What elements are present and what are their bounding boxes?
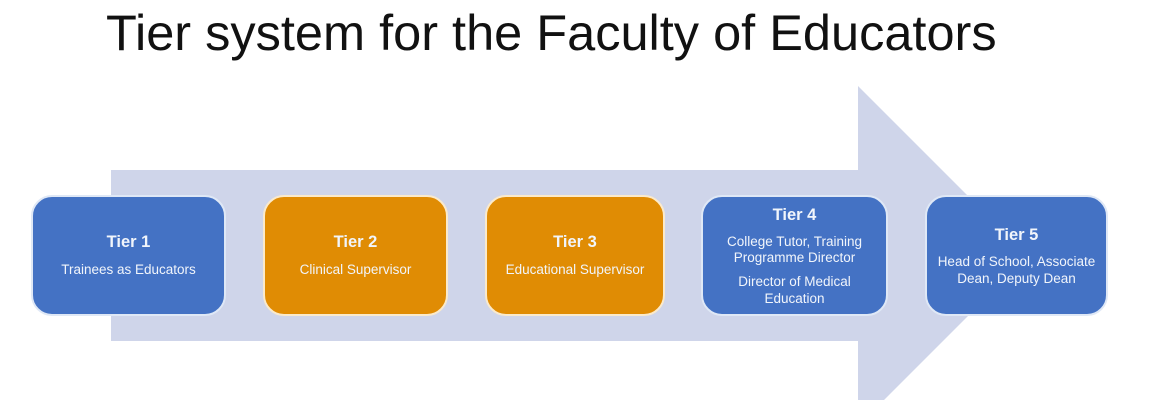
panel: tier 1: Trainees as Educators xyxy=(61,262,196,277)
panel: tier 3 xyxy=(485,195,665,316)
panel: tier 3: Educational Supervisor xyxy=(506,262,644,277)
panel: tier 5 xyxy=(925,195,1108,316)
panel: tier 1: Tier 1 xyxy=(107,233,150,251)
panel: tier 3: Tier 3 xyxy=(553,233,597,251)
panel: tier 4: College Tutor, Training xyxy=(727,234,862,249)
panel: tier 4: Tier 4 xyxy=(773,206,816,224)
panel: tier 4 xyxy=(701,195,888,316)
panel: tier 5: Dean, Deputy Dean xyxy=(957,271,1076,286)
panel: tier 5: Tier 5 xyxy=(995,226,1038,244)
panel: tier 4: Education xyxy=(764,291,825,306)
panel: tier 2: Clinical Supervisor xyxy=(300,262,411,277)
panel: tier 2: Tier 2 xyxy=(334,233,377,251)
panel: tier 1 xyxy=(31,195,226,316)
panel: tier 2 xyxy=(263,195,448,316)
title: Tier system for the Faculty of Educators xyxy=(106,4,997,61)
panel: tier 4: Director of Medical xyxy=(738,274,851,289)
panel: tier 4: Programme Director xyxy=(734,250,855,265)
panel: tier 5: Head of School, Associate xyxy=(938,254,1095,269)
